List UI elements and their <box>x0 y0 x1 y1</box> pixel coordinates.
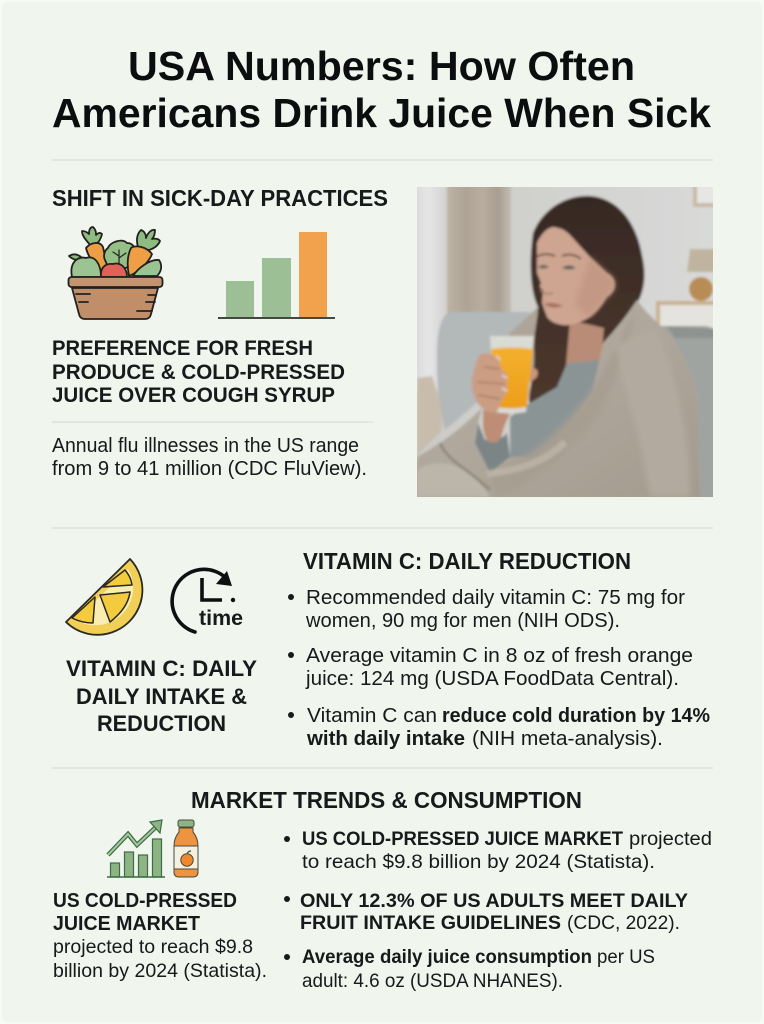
heading: vitamin c daily reduction: VITAMIN C: DAILY REDUCTION <box>303 548 631 574</box>
bullet: fruit intake guidelines: (CDC, 2022). <box>567 912 680 934</box>
bullet: cold-pressed market projection: to reach $9.8 billion by 2024 (Statista). <box>302 851 655 873</box>
bullet: fruit intake guidelines: ONLY 12.3% OF US ADULTS MEET DAILY <box>300 890 688 912</box>
icon: lemon slice <box>66 559 142 635</box>
text: annual flu illnesses: Annual flu illnesses in the US range <box>52 435 359 457</box>
panel: shift in sick-day practices <box>52 180 720 505</box>
subheading: preference for fresh produce <box>52 336 345 407</box>
bullet: average daily juice consumption: adult: 4.6 oz (USDA NHANES). <box>302 970 563 992</box>
subheading: preference for fresh produce: PREFERENCE FOR FRESH <box>52 336 313 360</box>
text: us cold-pressed juice market: JUICE MARKET <box>53 913 200 935</box>
bullet: cold-pressed market projection: US COLD-PRESSED JUICE MARKET <box>302 828 623 850</box>
photo: sick woman holding orange juice under blanket <box>410 180 720 505</box>
icon: clock with time label <box>172 569 243 632</box>
subheading: vitamin c daily intake and reduction <box>66 656 257 736</box>
icon: juice bottle <box>174 820 198 877</box>
heading: shift in sick-day practices: SHIFT IN SICK-DAY PRACTICES <box>52 185 388 211</box>
bullet: reduce cold duration: (NIH meta-analysis). <box>472 728 663 750</box>
title: Americans Drink Juice When Sick <box>52 90 711 136</box>
icon: rising bar chart <box>218 232 335 318</box>
bullet: recommended daily vitamin c <box>288 587 685 632</box>
icon: vegetable basket <box>68 227 162 319</box>
bullet: average daily juice consumption <box>284 946 655 992</box>
bullet: recommended daily vitamin c: women, 90 mg for men (NIH ODS). <box>305 610 620 632</box>
bullet: reduce cold duration <box>288 705 710 750</box>
text: us cold-pressed juice market <box>53 890 267 982</box>
bullet: average daily juice consumption: Average daily juice consumption <box>302 946 592 968</box>
text: us cold-pressed juice market: US COLD-PRESSED <box>53 890 237 912</box>
text: us cold-pressed juice market: billion by 2024 (Statista). <box>53 960 267 982</box>
bullet: vitamin c in orange juice: juice: 124 mg (USDA FoodData Central). <box>305 668 679 690</box>
subheading: preference for fresh produce: JUICE OVER COUGH SYRUP <box>52 383 335 407</box>
icon: growth chart <box>107 820 165 877</box>
title: USA Numbers: How Often <box>128 43 635 89</box>
bullet: reduce cold duration: Vitamin C can <box>307 705 437 727</box>
bullet: reduce cold duration: reduce cold duration by 14% <box>442 705 710 727</box>
bullet: fruit intake guidelines <box>284 890 688 934</box>
bullet: cold-pressed market projection <box>284 828 712 873</box>
bullet: average daily juice consumption: per US <box>597 946 655 968</box>
subheading: vitamin c daily intake and reduction: REDUCTION <box>97 711 226 736</box>
text: us cold-pressed juice market: projected to reach $9.8 <box>53 936 253 958</box>
bullet: cold-pressed market projection: projected <box>629 828 712 850</box>
bullet: fruit intake guidelines: FRUIT INTAKE GUIDELINES <box>300 912 561 934</box>
bullet: recommended daily vitamin c: Recommended daily vitamin C: 75 mg for <box>306 587 685 609</box>
text: annual flu illnesses: from 9 to 41 million (CDC FluView). <box>52 458 367 480</box>
icon: clock with time label: time <box>199 607 243 630</box>
text: annual flu illnesses <box>52 435 367 480</box>
subheading: vitamin c daily intake and reduction: VITAMIN C: DAILY <box>66 656 257 681</box>
bullet: reduce cold duration: with daily intake <box>306 728 465 750</box>
bullet: vitamin c in orange juice <box>288 645 693 690</box>
panel: market trends <box>53 787 712 992</box>
subheading: vitamin c daily intake and reduction: DAILY INTAKE & <box>76 684 247 709</box>
heading: market trends and consumption: MARKET TRENDS & CONSUMPTION <box>191 787 582 813</box>
subheading: preference for fresh produce: PRODUCE & COLD-PRESSED <box>52 360 345 384</box>
title <box>52 43 711 136</box>
panel: vitamin c <box>66 548 710 750</box>
bullet: vitamin c in orange juice: Average vitamin C in 8 oz of fresh orange <box>306 645 693 667</box>
